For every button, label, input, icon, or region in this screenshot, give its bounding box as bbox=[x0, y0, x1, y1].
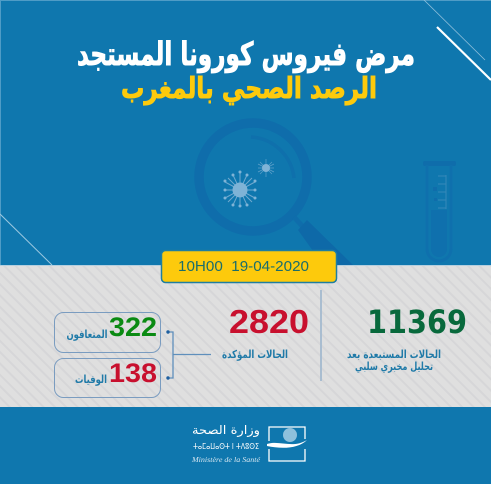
icon: large virus bbox=[224, 170, 256, 208]
stat: recovered bbox=[54, 312, 160, 352]
stat: deaths bbox=[54, 358, 160, 398]
label: excluded cases: الحالات المستبعدة بعد bbox=[347, 348, 441, 361]
icon: test tube bbox=[423, 161, 456, 261]
icon: small virus bbox=[258, 159, 274, 177]
ministry name in Amazigh: ⵜⴰⵎⴰⵡⴰⵙⵜ ⵏ ⵜⴷⵓⵙⵉ bbox=[193, 442, 259, 451]
stat: excluded cases: تحليل مخبري سلبي bbox=[355, 360, 433, 373]
title bbox=[77, 35, 415, 105]
number: 11369: 11369 bbox=[367, 303, 467, 341]
footer logo: ministry of health bbox=[191, 423, 307, 464]
ministry name in Arabic: وزارة الصحة bbox=[192, 423, 260, 438]
date text: 10H00 19-04-2020 bbox=[178, 258, 309, 275]
icon: logo emblem bbox=[267, 427, 307, 461]
stat: excluded cases bbox=[347, 303, 467, 373]
label: recovered: المتعافون bbox=[66, 328, 108, 341]
label: confirmed cases: الحالات المؤكدة bbox=[222, 348, 288, 361]
number: 322: 322 bbox=[109, 312, 157, 342]
ministry name in French: Ministère de la Santé bbox=[191, 455, 261, 464]
title line 2: الرصد الصحي بالمغرب bbox=[121, 71, 377, 105]
panel: grey statistics band bbox=[0, 265, 491, 407]
label: deaths: الوفيات bbox=[75, 373, 107, 386]
stat: confirmed cases bbox=[222, 303, 309, 361]
icon: magnifying glass with viruses bbox=[199, 123, 353, 265]
number: 2820: 2820 bbox=[229, 303, 309, 340]
divider bbox=[320, 290, 322, 381]
number: 138: 138 bbox=[109, 358, 157, 388]
date badge bbox=[162, 250, 336, 282]
bracket connector bbox=[166, 330, 211, 380]
